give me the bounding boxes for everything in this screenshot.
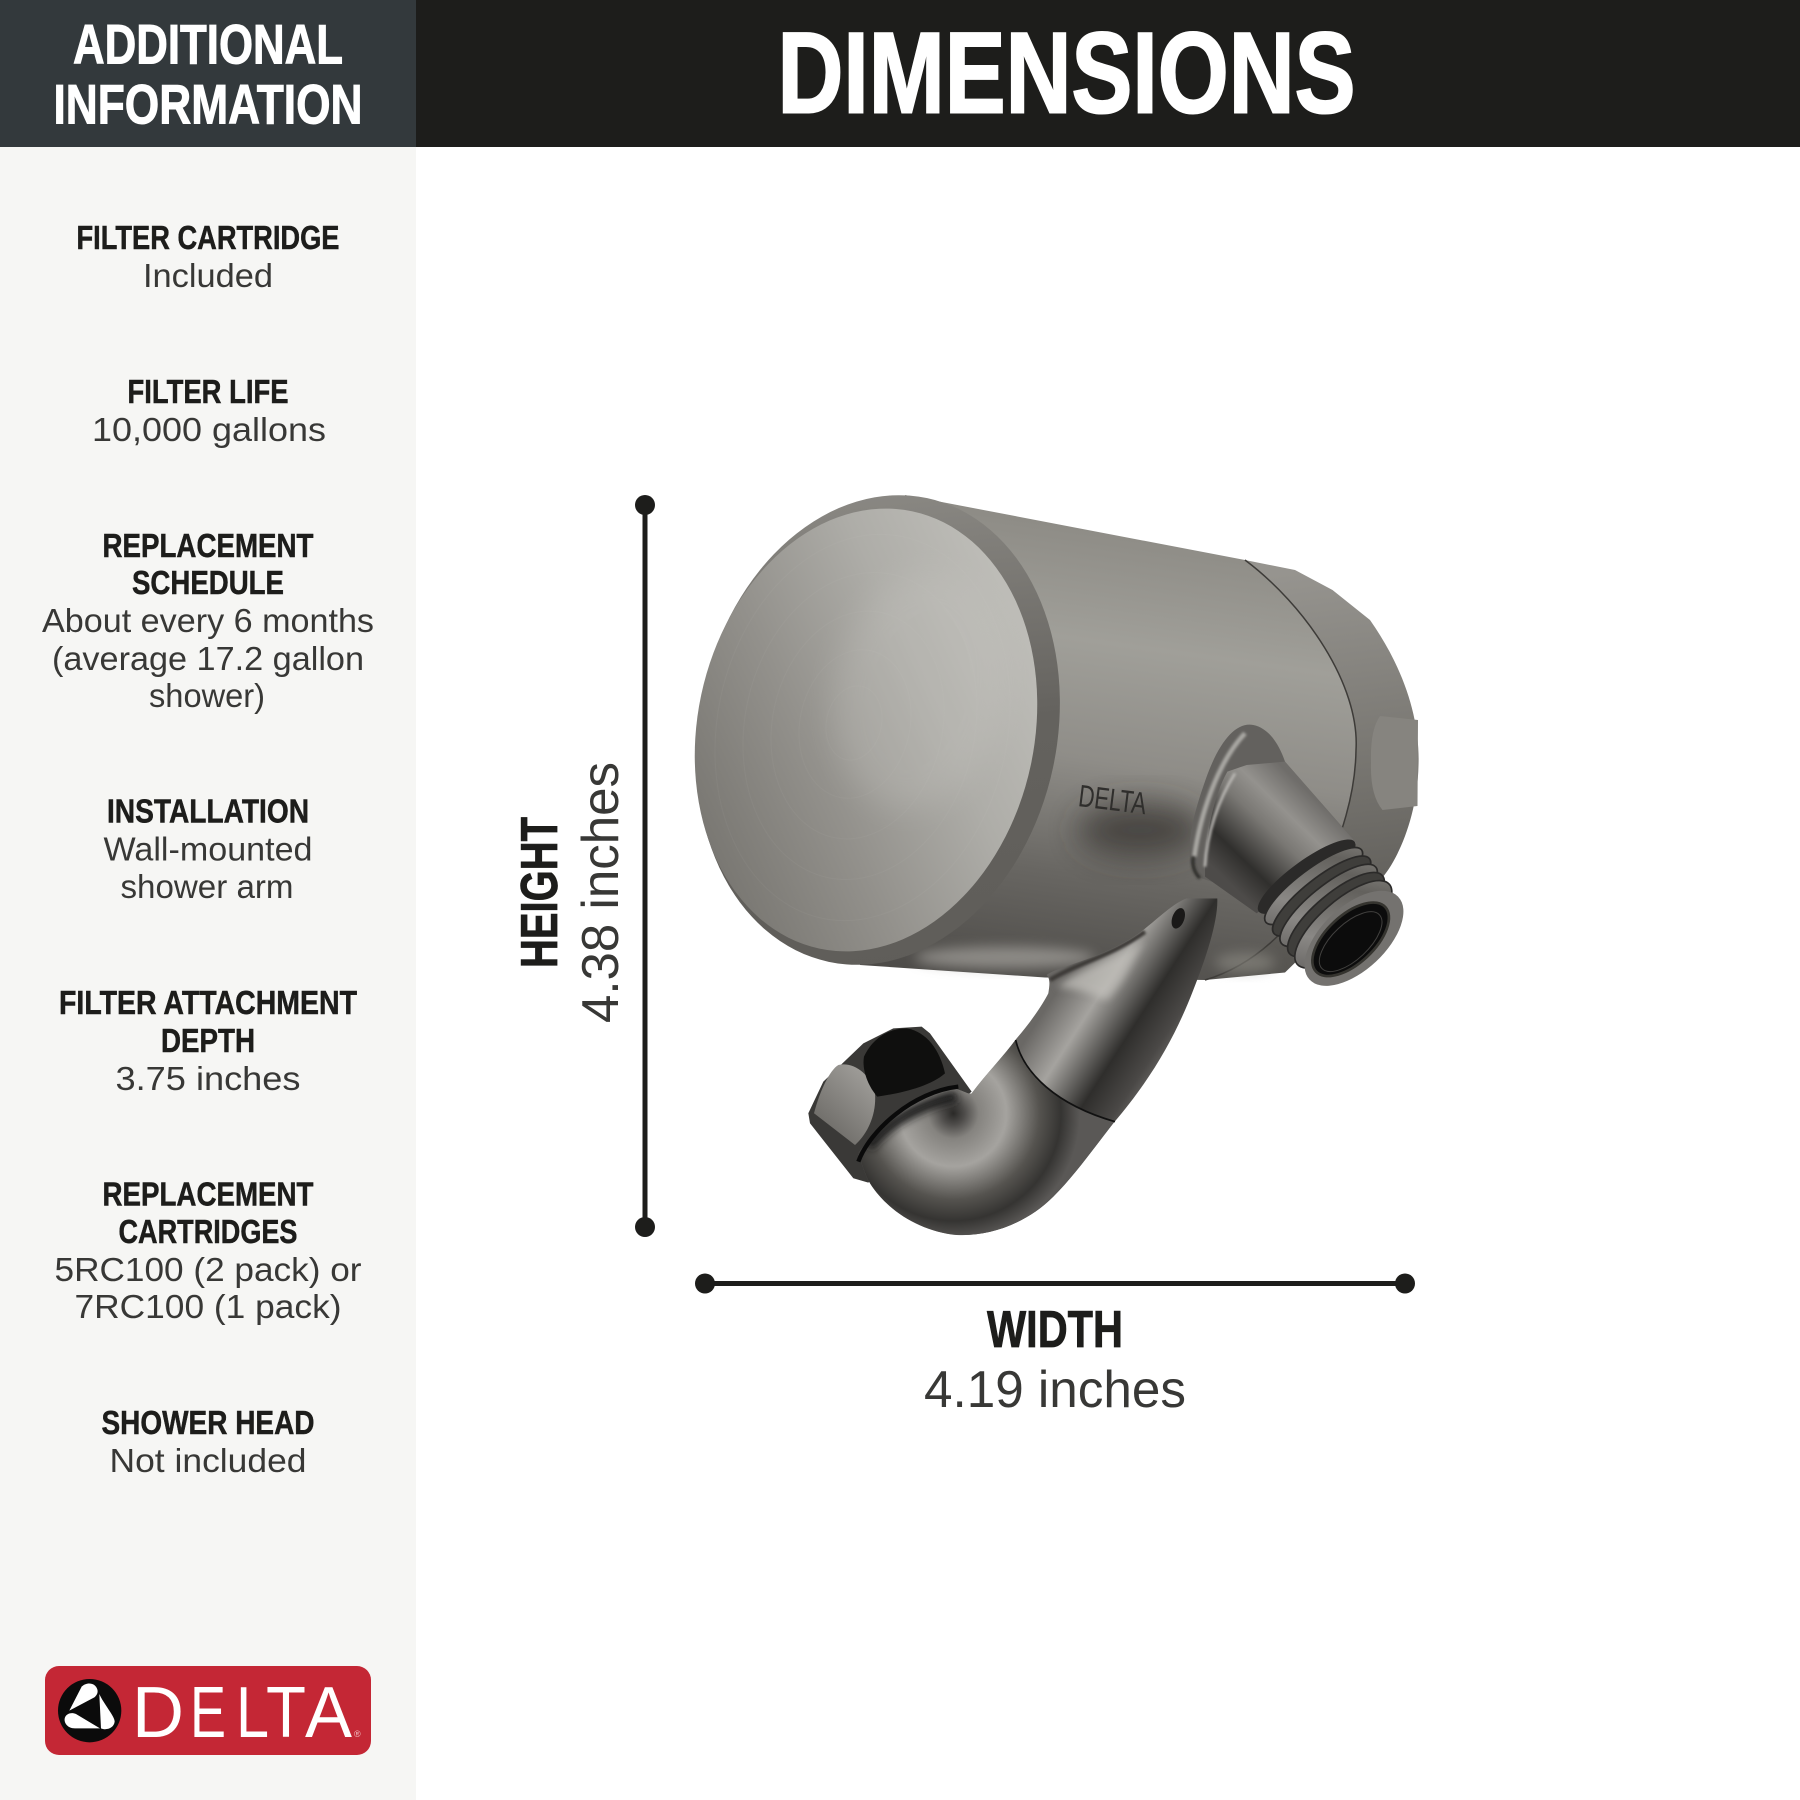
spec: replacement schedule: SCHEDULE [132,564,284,601]
spec: replacement schedule: shower) [149,677,265,714]
spec: replacement schedule [42,527,374,714]
width label [924,1301,1186,1419]
outlet port [1190,725,1420,1003]
height dimension line [635,495,655,1237]
header: dimensions title [416,0,1800,147]
width dimension line [695,1274,1415,1294]
face rim and brushed disc: DELTA [1077,778,1149,821]
header: dimensions title: DIMENSIONS [778,10,1356,138]
hex nut [808,1027,972,1183]
spec: replacement cartridges: REPLACEMENT [102,1176,314,1212]
spec: installation: shower arm [120,868,294,905]
arm joint line [1016,1040,1115,1122]
spec: shower head: Not included [110,1442,306,1479]
height label [511,762,630,1023]
spec: shower head [102,1404,314,1479]
logo wordmark: E [190,1673,226,1753]
spec: filter cartridge: FILTER CARTRIDGE [76,219,340,256]
logo wordmark: T [266,1673,306,1753]
logo: delta [45,1666,371,1755]
spec: replacement schedule: About every 6 months [42,602,374,639]
spec: installation: INSTALLATION [107,792,309,830]
spec: installation [104,792,312,905]
spec: filter attachment depth [59,984,357,1097]
header: additional information: ADDITIONAL [73,12,343,76]
logo wordmark [132,1673,361,1753]
height label: HEIGHT [511,817,569,968]
face rim and brushed disc [654,461,1149,999]
threaded end [1249,829,1420,1003]
header: additional information [0,0,416,147]
housing and cylinder body [860,495,1419,980]
spec: filter attachment depth: 3.75 inches [116,1060,300,1097]
spec: filter cartridge: Included [143,257,273,294]
logo wordmark: L [236,1673,269,1753]
spec: filter attachment depth: DEPTH [161,1022,255,1059]
spec: filter life: FILTER LIFE [128,373,288,410]
product image: filter shower attachment [694,495,1419,1236]
spec: replacement schedule: REPLACEMENT [102,527,314,564]
arm and hex nut [808,893,1240,1247]
panel: additional information sidebar [0,146,416,1800]
height label: 4.38 inches [572,762,630,1023]
curved arm [858,898,1218,1236]
logo wordmark: A [305,1673,352,1753]
icon: delta triangle mark [58,1679,121,1742]
logo wordmark: D [132,1673,184,1753]
logo wordmark: ® [354,1729,361,1739]
spec: filter life [92,373,326,448]
spec: replacement cartridges [54,1176,362,1325]
port tube and flange [1190,725,1357,913]
spec: installation: Wall-mounted [104,830,312,868]
header: additional information: INFORMATION [54,72,362,136]
spec: replacement cartridges: 5RC100 (2 pack) or [54,1251,362,1288]
spec: replacement schedule: (average 17.2 gallon [52,640,364,677]
width label: 4.19 inches [924,1361,1186,1419]
nut collar [858,1087,958,1162]
spec: filter life: 10,000 gallons [92,411,326,448]
spec: filter cartridge [76,219,340,294]
spec: replacement cartridges: 7RC100 (1 pack) [74,1288,342,1325]
width label: WIDTH [987,1301,1123,1359]
spec: filter attachment depth: FILTER ATTACHMENT [59,984,357,1021]
spec: replacement cartridges: CARTRIDGES [118,1213,298,1250]
spec: shower head: SHOWER HEAD [102,1404,314,1441]
